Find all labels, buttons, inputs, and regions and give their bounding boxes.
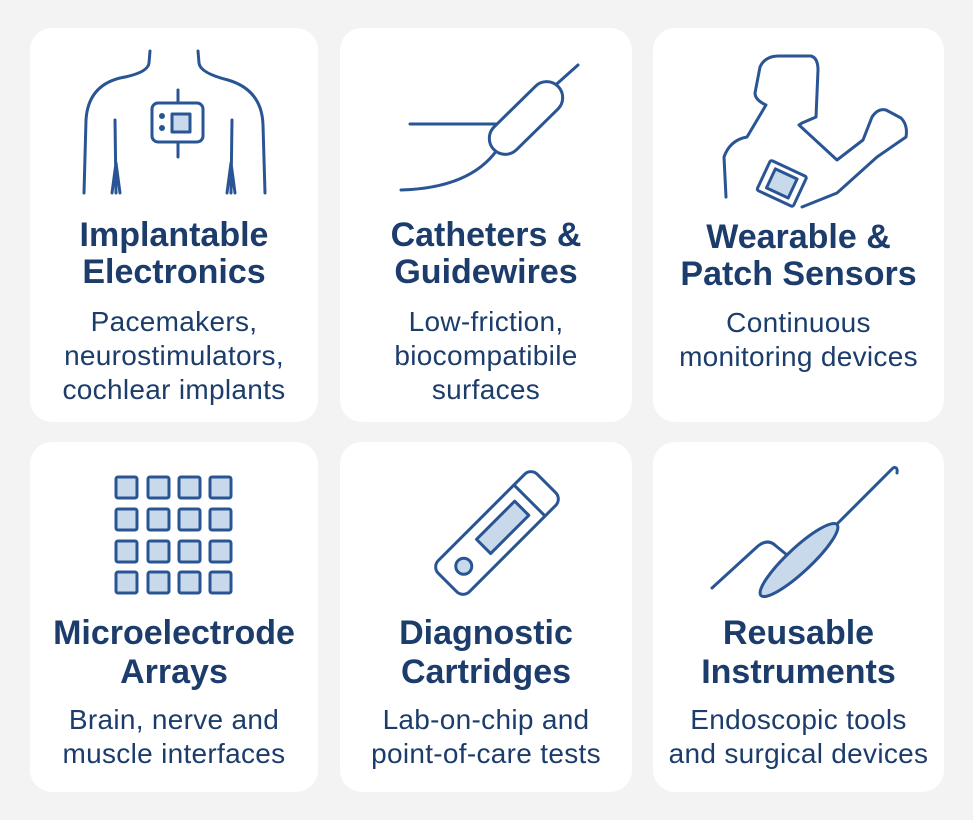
title: catheters: Guidewires [394, 253, 578, 291]
icon: torso with implant [84, 51, 265, 193]
title: catheters [391, 216, 581, 291]
icon: catheter [401, 65, 578, 190]
desc: microelectrode: muscle interfaces [63, 738, 285, 769]
desc: implantable: cochlear implants [62, 374, 285, 405]
title: diagnostic: Diagnostic [399, 614, 573, 652]
title: reusable: Instruments [701, 653, 896, 691]
title: wearable [680, 218, 917, 293]
title: reusable: Reusable [723, 614, 874, 652]
title: microelectrode [53, 614, 295, 691]
desc: catheters [394, 306, 578, 405]
title: implantable: Implantable [80, 216, 268, 254]
title: diagnostic: Cartridges [401, 653, 571, 691]
desc: microelectrode [63, 704, 285, 769]
desc: diagnostic: Lab-on-chip and [383, 704, 589, 735]
title: implantable [80, 216, 268, 291]
icon: surgical tool [712, 468, 897, 604]
desc: implantable: neurostimulators, [64, 340, 284, 371]
desc: wearable [679, 307, 918, 372]
panel: microelectrode [30, 442, 318, 792]
icon: electrode grid [116, 477, 231, 593]
desc: reusable [669, 704, 928, 769]
desc: reusable: Endoscopic tools [690, 704, 907, 735]
desc: implantable [62, 306, 285, 405]
panel: diagnostic [340, 442, 632, 792]
desc: wearable: monitoring devices [679, 341, 918, 372]
desc: wearable: Continuous [726, 307, 871, 338]
panel: catheters [340, 28, 632, 422]
desc: reusable: and surgical devices [669, 738, 928, 769]
title: microelectrode: Arrays [120, 653, 228, 691]
desc: catheters: surfaces [432, 374, 540, 405]
desc: catheters: Low-friction, [409, 306, 563, 337]
title: implantable: Electronics [82, 253, 266, 291]
icon: person with patch [724, 56, 906, 207]
title: wearable: Patch Sensors [680, 255, 917, 293]
title: reusable [701, 614, 896, 691]
icon: cartridge [432, 468, 562, 598]
title: wearable: Wearable & [706, 218, 891, 256]
panel: wearable [653, 28, 944, 422]
desc: implantable: Pacemakers, [91, 306, 257, 337]
panel: reusable [653, 442, 944, 792]
desc: diagnostic [371, 704, 601, 769]
panel: implantable electronics [30, 28, 318, 422]
desc: diagnostic: point-of-care tests [371, 738, 601, 769]
title: diagnostic [399, 614, 573, 691]
title: microelectrode: Microelectrode [53, 614, 295, 652]
desc: catheters: biocompatibile [394, 340, 578, 371]
desc: microelectrode: Brain, nerve and [69, 704, 279, 735]
title: catheters: Catheters & [391, 216, 581, 254]
